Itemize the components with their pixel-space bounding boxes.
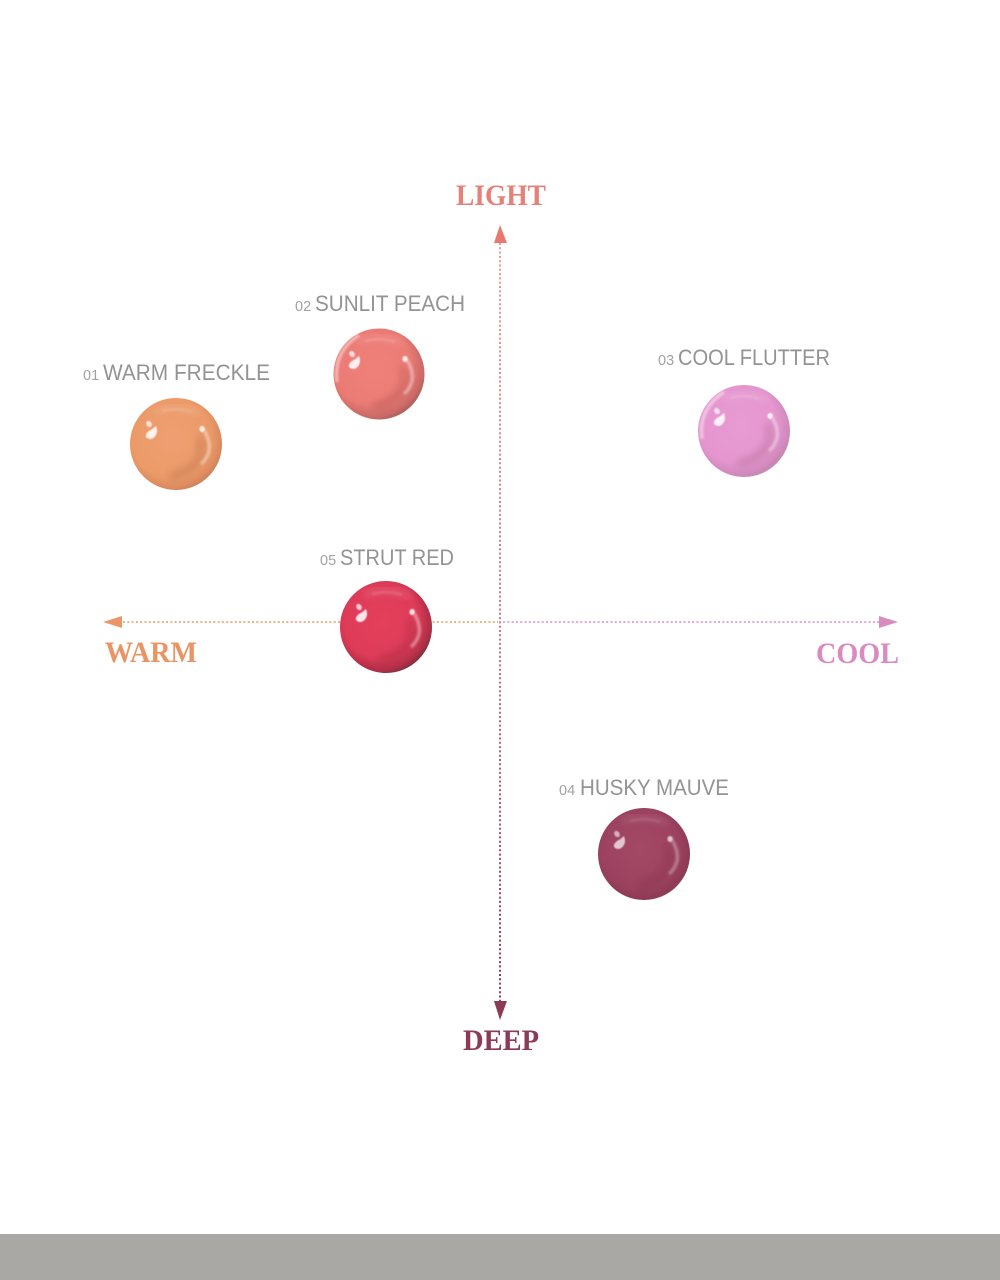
axis label: LIGHT: LIGHT [456, 179, 546, 212]
shade 04 label: HUSKY MAUVE [580, 775, 729, 800]
shade 02 swatch [334, 328, 424, 420]
axis: light to deep (vertical) [494, 225, 507, 1020]
shade 01 label: WARM FRECKLE [103, 360, 270, 385]
shade 03 label: 03 [658, 353, 674, 369]
shade 02 label: SUNLIT PEACH [315, 291, 465, 316]
shade 04 label: 04 [559, 783, 575, 799]
axis label: WARM: WARM [105, 636, 197, 669]
shade 05 label: 05 [320, 553, 336, 569]
shade 05 swatch [340, 581, 432, 673]
footer band [0, 1234, 1000, 1280]
axis: cool (right) [503, 616, 898, 628]
axis label: DEEP: DEEP [463, 1024, 539, 1057]
axis label: COOL: COOL [816, 637, 899, 670]
shade 01 swatch [130, 398, 222, 490]
shade 01 label: 01 [83, 368, 99, 384]
axis: warm (left) [103, 616, 498, 628]
shade 04 swatch [598, 808, 690, 900]
shade 05 label: STRUT RED [340, 545, 454, 570]
shade 02 label: 02 [295, 299, 311, 315]
shade 03 label: COOL FLUTTER [678, 345, 830, 370]
shade 03 swatch [698, 385, 790, 477]
